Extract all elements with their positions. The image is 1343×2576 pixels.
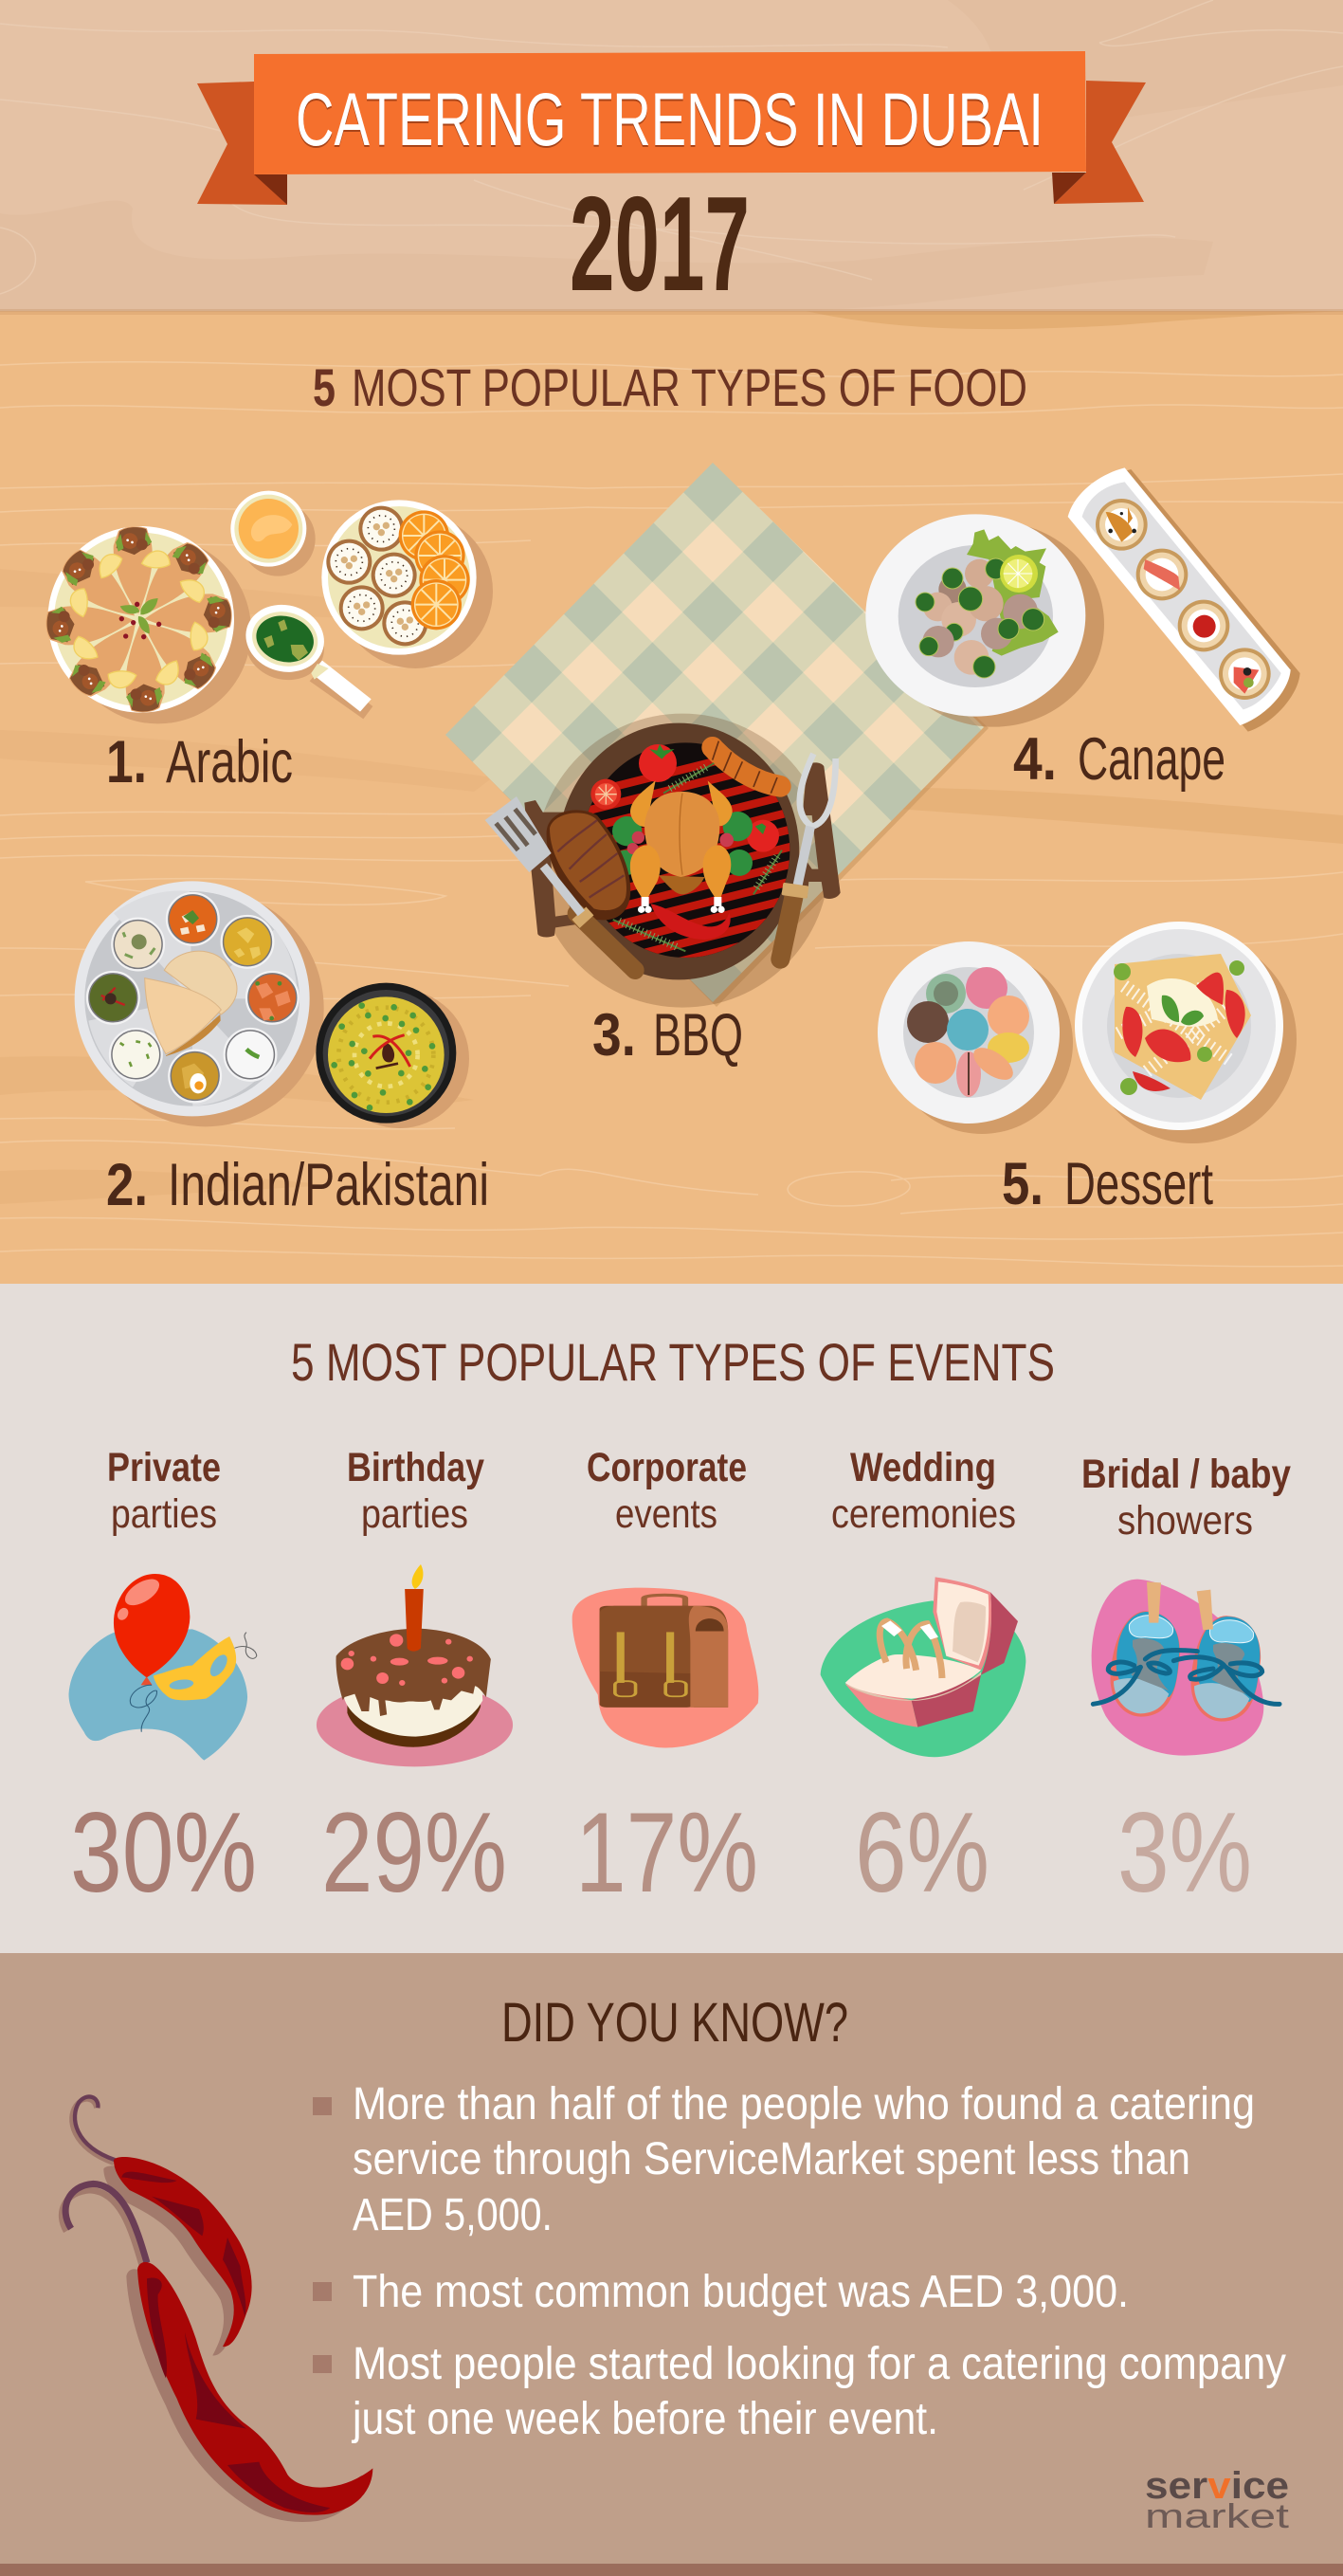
- grill stand right: [798, 762, 841, 899]
- snail plate: [865, 514, 1104, 727]
- panel: food table background: [0, 311, 1343, 1284]
- column: birthday parties: [317, 1445, 513, 1916]
- label: private parties: parties: [111, 1491, 217, 1537]
- label: BBQ: 3.: [592, 1002, 636, 1069]
- label: bridal / baby showers: showers: [1117, 1498, 1253, 1544]
- heading: events: 5 MOST POPULAR TYPES OF EVENTS: [291, 1332, 1055, 1392]
- macaron plate: [878, 941, 1073, 1134]
- column: private parties: [68, 1445, 257, 1916]
- label: birthday parties: parties: [361, 1491, 468, 1537]
- label: birthday parties: Birthday: [347, 1445, 484, 1490]
- title: CATERING TRENDS IN DUBAI: [296, 77, 1044, 161]
- lower chilli: [62, 2183, 372, 2522]
- label: bridal / baby showers: [1081, 1452, 1291, 1544]
- arabic main plate: [38, 518, 251, 723]
- label: corporate events: events: [615, 1491, 717, 1537]
- green sauce spoon: [238, 596, 372, 719]
- chicken: [630, 780, 733, 913]
- label: Canape: 4.: [1013, 726, 1057, 793]
- icon: briefcase: [572, 1588, 758, 1747]
- sausage: [713, 747, 780, 786]
- heading: food: 5: [313, 357, 336, 417]
- bullet 1: service through ServiceMarket spent less than: [353, 2134, 1190, 2184]
- icon: ring box: [821, 1577, 1025, 1757]
- label: Canape: [1013, 726, 1225, 793]
- sauce bowl: [230, 491, 316, 576]
- food: Canape plates: [865, 467, 1300, 732]
- canape tray: [1068, 467, 1300, 732]
- heading: food: MOST POPULAR TYPES OF FOOD: [352, 357, 1027, 417]
- label: private parties: [107, 1445, 221, 1537]
- label: wedding ceremonies: ceremonies: [831, 1491, 1016, 1537]
- panel: events: [0, 1284, 1343, 1953]
- fork: [780, 754, 836, 959]
- label: corporate events: Corporate: [587, 1445, 747, 1490]
- bullet 3: just one week before their event.: [351, 2394, 938, 2444]
- label: birthday parties: [347, 1445, 484, 1537]
- column: bridal / baby showers: [1081, 1452, 1291, 1916]
- column: corporate events: [572, 1445, 758, 1916]
- label: Arabic: 1.: [106, 729, 147, 795]
- food: Indian and Pakistani: [75, 881, 469, 1128]
- bullet 2: The most common budget was AED 3,000.: [353, 2267, 1129, 2317]
- value: 29%: 29%: [321, 1789, 507, 1916]
- logo: servicemarket: [1145, 2465, 1289, 2535]
- label: wedding ceremonies: [831, 1445, 1016, 1537]
- tomatoes: [639, 744, 677, 782]
- icon: baby shoes: [1092, 1580, 1279, 1756]
- value: 3%: 3%: [1117, 1789, 1252, 1916]
- label: Indian/Pakistani: 2.: [106, 1152, 148, 1218]
- column: wedding ceremonies: [821, 1445, 1025, 1916]
- rice bowl: [316, 983, 469, 1128]
- rosemary: [613, 763, 782, 951]
- icon: chilli peppers: [62, 2096, 372, 2522]
- bullet 1: More than half of the people who found a catering: [353, 2079, 1255, 2129]
- logo: servicemarket: market: [1145, 2496, 1289, 2535]
- panel: did you know: [0, 1953, 1343, 2576]
- label: Dessert: 5.: [1002, 1151, 1044, 1217]
- napkin: [445, 463, 989, 1007]
- logo: servicemarket: service: [1145, 2465, 1289, 2507]
- bullet 1: [313, 2079, 1255, 2240]
- grill pan: [558, 723, 799, 979]
- label: BBQ: [592, 1002, 743, 1069]
- crackers and oranges plate: [321, 500, 493, 668]
- label: private parties: Private: [107, 1445, 221, 1490]
- food: Dessert plates: [878, 922, 1297, 1143]
- spatula: [485, 796, 635, 970]
- value: 6%: 6%: [855, 1789, 989, 1916]
- label: Indian/Pakistani: Indian/Pakistani: [168, 1152, 489, 1218]
- chilli: [651, 904, 731, 940]
- thali: [75, 881, 324, 1126]
- steak: [547, 810, 630, 920]
- label: wedding ceremonies: Wedding: [850, 1445, 996, 1490]
- food: Arabic plates: [38, 491, 493, 723]
- grill stand left: [524, 800, 576, 937]
- upper chilli: [72, 2096, 252, 2355]
- icon: balloon and mask: [68, 1574, 257, 1761]
- broccoli: [612, 812, 753, 876]
- label: bridal / baby showers: Bridal / baby: [1081, 1452, 1291, 1497]
- value: 17%: 17%: [575, 1789, 758, 1916]
- label: corporate events: [587, 1445, 747, 1537]
- bullet list: [313, 2079, 1286, 2444]
- bullet 3: [313, 2339, 1286, 2444]
- bullet 1: AED 5,000.: [353, 2190, 553, 2240]
- label: Dessert: [1002, 1151, 1213, 1217]
- food: BBQ grill: [485, 714, 841, 1008]
- year: 2017: [570, 169, 750, 320]
- value: 30%: 30%: [70, 1789, 257, 1916]
- ribbon banner: [197, 51, 1146, 205]
- icon: birthday cake: [317, 1564, 513, 1766]
- waffle plate: [1075, 922, 1297, 1143]
- heading: did you know: DID YOU KNOW?: [501, 1992, 848, 2054]
- label: Arabic: Arabic: [166, 729, 293, 795]
- label: Arabic: [106, 729, 293, 795]
- label: Indian/Pakistani: [106, 1152, 489, 1218]
- label: BBQ: BBQ: [653, 1002, 743, 1069]
- label: Dessert: Dessert: [1064, 1151, 1213, 1217]
- panel: header wood background: [0, 0, 1343, 312]
- label: Canape: Canape: [1078, 726, 1225, 793]
